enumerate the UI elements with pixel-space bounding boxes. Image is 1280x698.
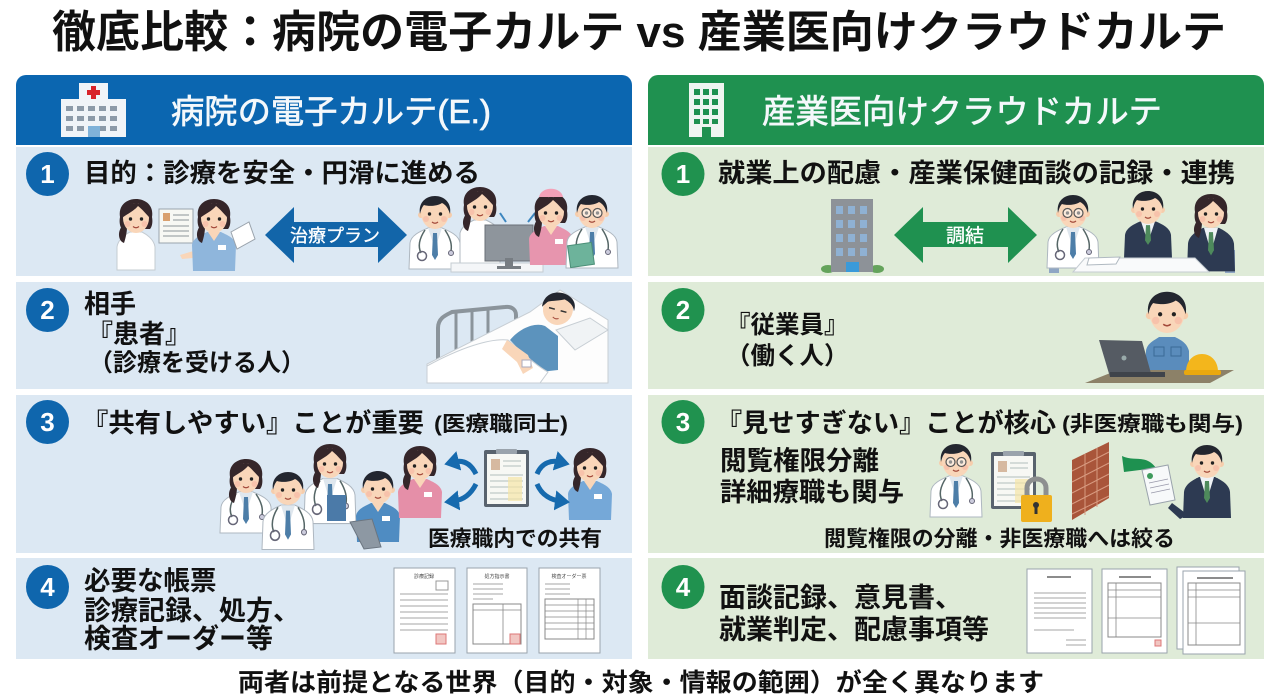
icon: office building <box>689 83 724 137</box>
illustration: worker at laptop <box>1085 292 1234 383</box>
illustration: patient and nurse with chart <box>117 199 255 271</box>
row 2: counterpart: 相手 <box>84 289 136 319</box>
row 3: easy sharing <box>16 395 632 553</box>
number badge 4 <box>662 565 704 609</box>
illustration: medical team at monitor <box>409 187 618 272</box>
illustration: doctor with locked record <box>930 444 1052 522</box>
row 2: employees: （働く人） <box>726 342 848 370</box>
number badge 4: 4 <box>40 572 55 602</box>
row 3: not showing too much: 『見せすぎない』ことが核心 <box>716 408 1056 438</box>
row 1: purpose: 目的：診療を安全・円滑に進める <box>84 158 480 188</box>
number badge 2 <box>26 288 69 332</box>
row 3: not showing too much: 閲覧権限の分離・非医療職へは絞る <box>824 527 1175 551</box>
number badge 3: 3 <box>40 407 55 437</box>
illustration: patient in bed <box>427 289 608 383</box>
number badge 1: 1 <box>40 159 55 189</box>
number badge 4: 4 <box>676 572 691 602</box>
panel: hospital electronic medical record <box>16 75 632 659</box>
row 2: counterpart <box>16 282 632 389</box>
illustration: limited disclosure to manager <box>1122 445 1231 519</box>
row 3: not showing too much: (非医療職も関与) <box>1062 413 1243 436</box>
illustration: doctor meeting with staff <box>1047 191 1235 273</box>
documents: occupational forms <box>1027 567 1245 654</box>
row 4: required forms <box>16 558 632 659</box>
documents: medical forms <box>394 568 600 653</box>
illustration: clinicians sharing a record <box>220 444 612 549</box>
arrows: sharing flow <box>454 461 560 501</box>
header: cloud record: 産業医向けクラウドカルテ <box>762 93 1162 130</box>
number badge 2: 2 <box>40 295 55 325</box>
number badge 2 <box>662 288 704 332</box>
row 2: employees: 『従業員』 <box>726 311 848 339</box>
row 3: not showing too much: 閲覧権限分離 <box>720 446 879 476</box>
number badge 2: 2 <box>676 295 690 325</box>
number badge 1: 1 <box>676 159 690 189</box>
documents: medical forms: 検査オーダー票 <box>551 573 587 580</box>
header: cloud record <box>648 75 1264 145</box>
header: hospital <box>16 75 632 145</box>
row 1: occupational records <box>648 147 1264 276</box>
row 3: easy sharing: 『共有しやすい』ことが重要 <box>82 408 424 438</box>
row 3: not showing too much <box>648 395 1264 553</box>
header: hospital: 病院の電子カルテ(E.) <box>171 93 491 130</box>
double arrow: agreement: 調結 <box>946 225 984 247</box>
row 3: easy sharing: (医療職同士) <box>434 413 568 436</box>
panel: occupational physician cloud record <box>648 75 1264 659</box>
number badge 3: 3 <box>676 407 690 437</box>
row 3: not showing too much: 詳細療職も関与 <box>720 477 904 507</box>
illustration: office building <box>821 199 884 273</box>
footer summary: 両者は前提となる世界（目的・対象・情報の範囲）が全く異なります <box>238 668 1044 697</box>
number badge 1 <box>662 152 704 196</box>
row 4: occupational forms: 面談記録、意見書、 <box>719 583 962 613</box>
title: 徹底比較：病院の電子カルテ vs 産業医向けクラウドカルテ <box>52 8 1226 57</box>
icon: hospital building <box>61 83 126 137</box>
double arrow: treatment plan <box>265 207 407 263</box>
row 3: easy sharing: 医療職内での共有 <box>428 527 602 551</box>
row 4: required forms: 診療記録、処方、 <box>84 596 300 626</box>
row 1: occupational records: 就業上の配慮・産業保健面談の記録・連携 <box>718 158 1235 188</box>
double arrow: agreement <box>894 207 1037 263</box>
documents: medical forms: 診療記録 <box>414 573 434 580</box>
row 2: employees <box>648 282 1264 389</box>
illustration: brick wall <box>1072 442 1109 520</box>
row 2: counterpart: 『患者』 <box>87 319 191 349</box>
row 4: occupational forms <box>648 558 1264 659</box>
row 2: counterpart: （診療を受ける人） <box>89 349 305 377</box>
row 1: purpose <box>16 147 632 276</box>
documents: medical forms: 処方指示書 <box>484 573 510 580</box>
double arrow: treatment plan: 治療プラン <box>290 226 380 246</box>
number badge 3 <box>26 400 69 444</box>
number badge 1 <box>26 152 69 196</box>
row 4: occupational forms: 就業判定、配慮事項等 <box>719 615 989 645</box>
row 4: required forms: 検査オーダー等 <box>84 623 273 654</box>
number badge 4 <box>26 565 69 609</box>
number badge 3 <box>662 400 704 444</box>
row 4: required forms: 必要な帳票 <box>84 566 216 596</box>
